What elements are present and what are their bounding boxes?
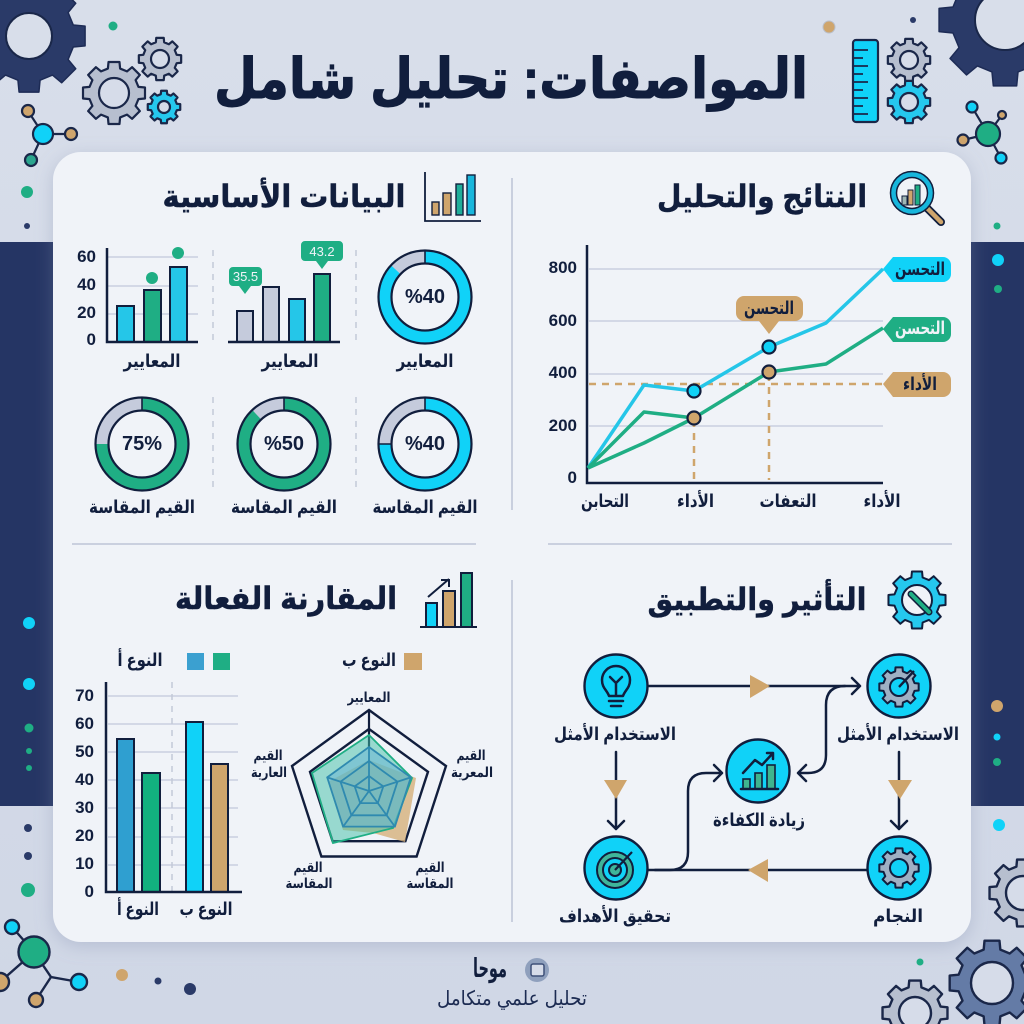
- molecule top right: [958, 102, 1006, 164]
- node: gear with dart: [868, 654, 930, 718]
- panel: effective comparison: [75, 573, 493, 920]
- panel: basic data: [77, 172, 481, 517]
- label: optimal use right: الاستخدام الأمثل: [837, 723, 959, 744]
- bar chart: dots: [77, 247, 198, 349]
- tag: tan performance: [883, 372, 951, 397]
- donut: 50: [238, 398, 330, 490]
- radar chart: القيم: [456, 747, 486, 763]
- line chart: التحابن: [581, 491, 629, 512]
- donut: 75: 75%: [122, 433, 162, 455]
- panel: impact and application: [554, 571, 959, 927]
- radar chart: العارية: [251, 764, 287, 780]
- footer logo: تحليل علمي متكامل: [437, 988, 587, 1011]
- footer logo: موحا: [473, 953, 507, 984]
- bar chart: type comparison: 40: [75, 770, 94, 789]
- radar chart: المقاسة: [286, 875, 332, 891]
- label: measured values left: القيم المقاسة: [89, 497, 195, 517]
- label: criteria: المعايير: [396, 351, 454, 372]
- node: gear: [868, 836, 930, 900]
- legend: النوع أ: [118, 648, 162, 671]
- bar chart: type comparison: 60: [75, 714, 94, 733]
- line chart: الأداء: [864, 490, 900, 511]
- radar chart: المقاسة: [406, 875, 454, 891]
- callout: improvement: التحسن: [744, 298, 794, 319]
- callout: improvement: [736, 296, 803, 334]
- tag: cyan improvement: [883, 257, 951, 282]
- bar chart: dots: 60: [77, 247, 96, 266]
- bar chart: callouts: 43.2: [309, 244, 335, 259]
- gears cluster top left: [83, 38, 181, 124]
- label: achieving goals: تحقيق الأهداف: [559, 905, 671, 927]
- radar chart: [251, 689, 493, 891]
- main white panel: [53, 152, 971, 942]
- label: measured values middle: القيم المقاسة: [231, 497, 337, 517]
- node: target: [584, 836, 648, 900]
- line chart: 400: [549, 363, 577, 382]
- line chart: 800: [549, 258, 577, 277]
- right navy band: [968, 242, 1024, 806]
- bar chart: type comparison: النوع أ: [117, 897, 159, 920]
- band dots: [23, 254, 1005, 831]
- icon: growth bars: [420, 573, 477, 627]
- donut: 40 top: [378, 250, 472, 344]
- top right dots: [823, 17, 1000, 230]
- label: increased efficiency: زيادة الكفاءة: [713, 810, 805, 830]
- donut: 40 bottom: [378, 398, 472, 490]
- decorative gear top left: [0, 0, 85, 92]
- legend: [118, 648, 422, 671]
- flow arrows: [604, 675, 912, 882]
- tag: cyan improvement: التحسن: [895, 259, 945, 280]
- heading: basic data: البيانات الأساسية: [162, 177, 406, 214]
- label: criteria middle: المعايير: [261, 351, 318, 372]
- icon: magnifier: [890, 172, 941, 222]
- radar chart: القيم: [254, 747, 282, 763]
- icon: ruler and gears: [853, 39, 930, 123]
- radar chart: القيم: [416, 859, 444, 875]
- line chart: الأداء: [677, 490, 714, 511]
- footer logo: [437, 953, 587, 1011]
- bar chart: type comparison: 20: [75, 826, 94, 845]
- tag: tan performance: الأداء: [903, 373, 937, 394]
- decorative bottom left dots: [21, 824, 196, 995]
- title: المواصفات: تحليل شامل: [214, 47, 808, 112]
- top left dots: [21, 22, 118, 229]
- decorative gears bottom right: [883, 860, 1024, 1024]
- bar chart: type comparison: 10: [75, 854, 94, 873]
- donut: 50: %50: [264, 433, 304, 455]
- line chart: 200: [549, 416, 577, 435]
- bar chart: type comparison: 50: [75, 742, 94, 761]
- decorative gear top right: [939, 0, 1024, 86]
- node: efficiency chart: [726, 740, 790, 802]
- bar chart: dots: 0: [87, 330, 96, 349]
- label: measured values right: القيم المقاسة: [372, 497, 478, 517]
- legend: النوع ب: [342, 650, 396, 671]
- line chart: [549, 245, 900, 512]
- molecule bottom left: [0, 920, 87, 1007]
- bottom right dot: [916, 958, 924, 966]
- bar chart: type comparison: 0: [85, 882, 94, 901]
- line chart: 0: [568, 468, 577, 487]
- left navy band: [0, 242, 56, 806]
- heading: comparison: المقارنة الفعالة: [175, 581, 397, 617]
- panel: results and analysis: [549, 172, 951, 512]
- bar chart: dots: 40: [77, 275, 96, 294]
- bar chart: type comparison: 30: [75, 798, 94, 817]
- separators: [213, 250, 356, 490]
- line chart: 600: [549, 311, 577, 330]
- tag: green improvement: التحسن: [895, 318, 945, 339]
- bar chart: type comparison: النوع ب: [180, 899, 232, 920]
- tag: green improvement: [883, 317, 951, 342]
- bar chart: type comparison: [75, 682, 242, 920]
- icon: gear and wrench: [888, 571, 946, 629]
- heading: results: النتائج والتحليل: [657, 179, 867, 215]
- donut: 40 bottom: %40: [405, 433, 445, 455]
- label: optimal use left: الاستخدام الأمثل: [554, 723, 676, 744]
- bar chart: callouts: 35.5: [233, 269, 258, 284]
- label: success: النجام: [873, 906, 923, 926]
- heading: impact: التأثير والتطبيق: [648, 579, 866, 618]
- molecule top left: [22, 105, 77, 166]
- label: criteria left: المعايير: [123, 351, 180, 372]
- radar chart: المعرية: [451, 764, 493, 781]
- dividers: [72, 178, 952, 922]
- donut: 75: [96, 398, 188, 490]
- radar chart: المعايير: [347, 689, 390, 706]
- line chart: التعفات: [760, 491, 816, 511]
- radar chart: القيم: [294, 859, 322, 875]
- bar chart: callouts: [228, 241, 343, 342]
- bar chart: type comparison: 70: [75, 686, 94, 705]
- icon: bars: [425, 172, 481, 221]
- bar chart: dots: 20: [77, 303, 96, 322]
- donut: 40 top: %40: [405, 286, 445, 308]
- node: bulb: [584, 654, 648, 718]
